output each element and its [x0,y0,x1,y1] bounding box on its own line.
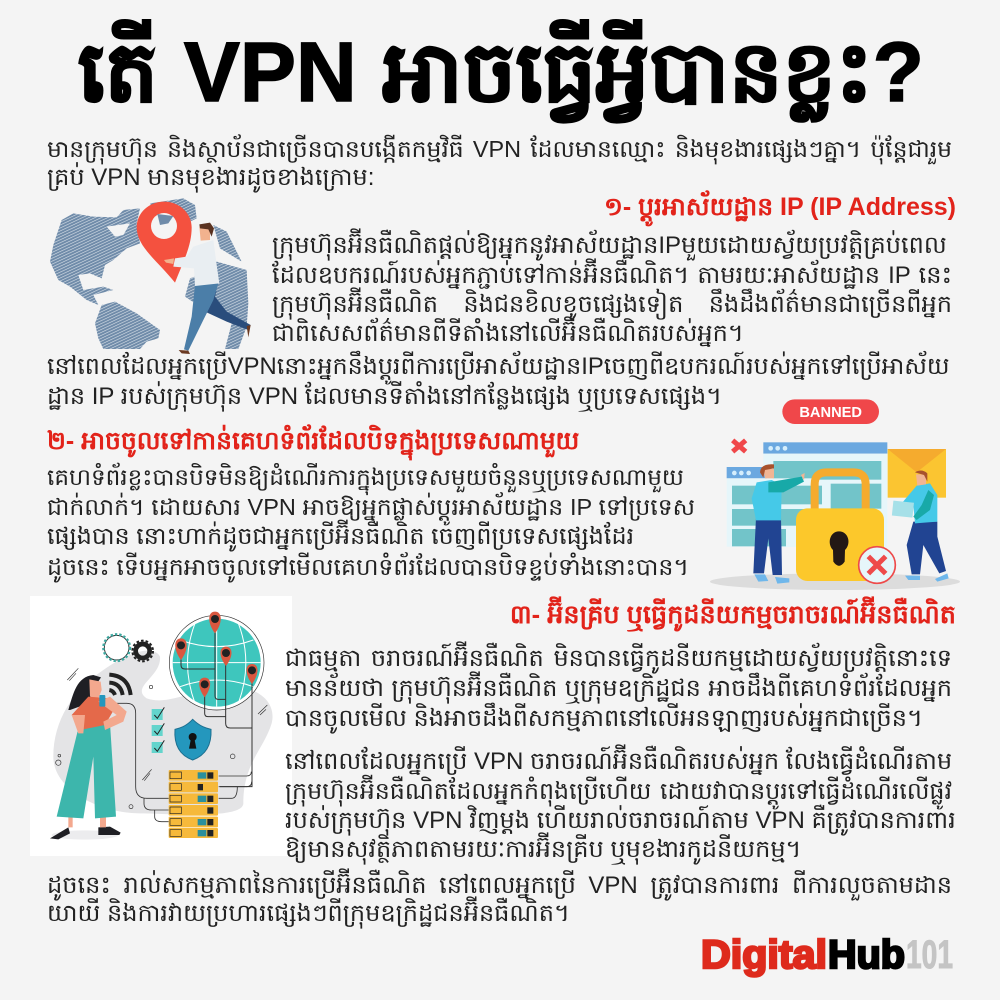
section 3 paragraph two: ក្រុមហ៊ុនអ៊ីនធឺណិតដែលអ្នកកំពុងប្រើហើយ ដោយវាបានប្តូរទៅធ្វើដំណើរលើផ្លូវ [285,779,952,805]
section 1 paragraph: ជាពិសេសព័ត៌មានពីទីតាំងនៅលើអ៊ីនធឺណិតរបស់អ្នក។ [272,320,744,347]
gears [103,634,153,661]
heading: section 3: ៣- អ៊ីនគ្រីប ឬធ្វើកូដនីយកម្មចរាចរណ៍អ៊ីនធឺណិត [510,601,956,629]
illustration: man carrying location pin over world map [50,198,251,354]
heading: section 1: ១- ប្តូរអាស័យដ្ឋាន IP (IP Address) [604,193,956,221]
title: តើ VPN អាចធ្វើអ្វីបានខ្លះ? [78,25,924,119]
closing paragraph: យាយី និងការវាយប្រហារផ្សេងៗពីក្រុមឧក្រិដ្ឋជនអ៊ីនធឺណិត។ [47,900,570,927]
section 2 paragraph: ដូចនេះ ទើបអ្នកអាចចូលទៅមើលគេហទំព័រដែលបានបិទខ្ទប់ទាំងនោះបាន។ [47,555,689,581]
section 3 paragraph two: របស់ក្រុមហ៊ុន VPN វិញម្តង ហើយរាល់ចរាចរណ៍តាម VPN គឺត្រូវបានការពារ [285,807,956,834]
closing paragraph [47,868,952,929]
wifi [109,675,131,695]
logo: DigitalHub101: Digital [701,933,827,977]
illustration: banned websites with padlock [710,399,960,590]
intro text: គ្រប់ VPN មានមុខងារដូចខាងក្រោម: [47,164,374,191]
section 2 paragraph [47,462,695,582]
section 1 paragraph: ដែលឧបករណ៍របស់អ្នកភ្ជាប់ទៅកាន់អ៊ីនធឺណិត។ តាមរយៈអាស័យដ្ឋាន IP នេះ [272,262,952,289]
section 3 paragraph two: ឱ្យមានសុវត្ថិភាពតាមរយៈការអ៊ីនគ្រីប ឬមុខងារកូដនីយកម្ម។ [285,836,801,863]
shield [175,719,211,760]
section 1 paragraph [272,228,952,347]
section 3 paragraph one: បានចូលមើល និងអាចដឹងពីសកម្មភាពនៅលើអនឡាញរបស់អ្នកជាច្រើន។ [285,705,923,732]
heading: section 2: ២- អាចចូលទៅកាន់គេហទំព័រដែលបិទក្នុងប្រទេសណាមួយ [47,427,579,455]
logo: DigitalHub101: Hub [828,933,905,977]
illustration: woman with phone, globe, shield and servers [50,612,272,840]
section 3 paragraph one [285,641,952,734]
BANNED badge: BANNED [799,405,862,421]
section 1 second paragraph: នៅពេលដែលអ្នកប្រើVPNនោះអ្នកនឹងប្តូរពីការប្រើអាស័យដ្ឋានIPចេញពីឧបករណ៍របស់អ្នកទៅប្រើអាស័យ [47,353,950,380]
closing paragraph: ដូចនេះ រាល់សកម្មភាពនៃការប្រើអ៊ីនធឺណិត នៅពេលអ្នកប្រើ VPN ត្រូវបានការពារ ពីការលួចតាមដាន [47,872,952,899]
logo: DigitalHub101 [701,933,953,978]
section 3 paragraph one: មានន័យថា ក្រុមហ៊ុនអ៊ីនធឺណិត ឬក្រុមឧក្រិដ្ឋជន អាចដឹងពីគេហទំព័រដែលអ្នក [285,675,952,702]
server rack [169,770,218,838]
intro text [47,134,952,193]
section 2 paragraph: ផ្សេងបាន នោះហាក់ដូចជាអ្នកប្រើអ៊ីនធឺណិត ចេញពីប្រទេសផ្សេងដែរ [47,523,634,550]
section 1 second paragraph: ដ្ឋាន IP របស់ក្រុមហ៊ុន VPN ដែលមានទីតាំងនៅកន្លែងផ្សេង ឬប្រទេសផ្សេង។ [47,383,722,410]
section 2 paragraph: គេហទំព័រខ្លះបានបិទមិនឱ្យដំណើរការក្នុងប្រទេសមួយចំនួនឬប្រទេសណាមួយ [47,464,684,490]
section 1 paragraph: ក្រុមហ៊ុនអ៊ីនធឺណិតផ្តល់ឱ្យអ្នកនូវអាស័យដ្ឋានIPមួយដោយស្វ័យប្រវត្តិគ្រប់ពេល [272,232,947,259]
section 1 paragraph: ក្រុមហ៊ុនអ៊ីនធឺណិត និងជនខិលខូចផ្សេងទៀត នឹងដឹងព័ត៌មានជាច្រើនពីអ្នក [272,291,952,318]
woman figure [50,675,127,839]
intro text: មានក្រុមហ៊ុន និងស្ថាប័នជាច្រើនបានបង្កើតកម្មវិធី VPN ដែលមានឈ្មោះ និងមុខងារផ្សេងៗគ្នា។ ប៉ុន្តែជារួម [47,136,952,162]
section 1 second paragraph [47,350,950,412]
section 3 paragraph one: ជាធម្មតា ចរាចរណ៍អ៊ីនធឺណិត មិនបានធ្វើកូដនីយកម្មដោយស្វ័យប្រវត្តិនោះទេ [285,645,952,672]
globe [169,612,264,787]
section 2 paragraph: ជាក់លាក់។ ដោយសារ VPN អាចឱ្យអ្នកផ្លាស់ប្តូរអាស័យដ្ឋាន IP ទៅប្រទេស [47,494,695,520]
section 3 paragraph two [285,744,956,865]
section 3 paragraph two: នៅពេលដែលអ្នកប្រើ VPN ចរាចរណ៍អ៊ីនធឺណិតរបស់អ្នក លែងធ្វើដំណើរតាម [285,748,952,775]
BANNED badge [782,399,879,424]
panel: encryption illustration [30,596,292,856]
checklist [152,707,164,753]
